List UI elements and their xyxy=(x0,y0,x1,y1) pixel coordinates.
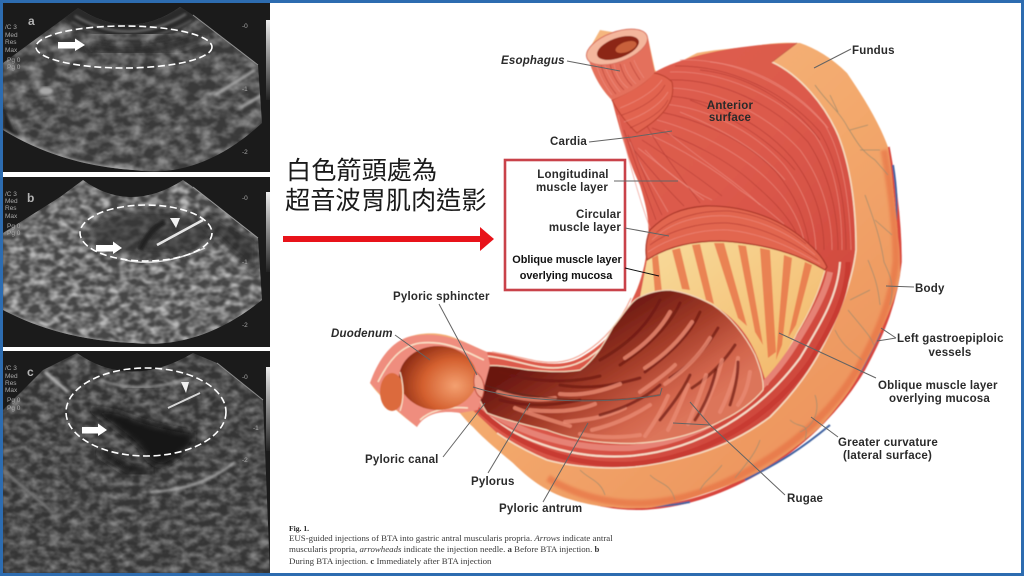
panel: ultrasound b: Pg 0 xyxy=(7,223,21,230)
panel: ultrasound b: Res xyxy=(5,205,17,212)
esophagus tube xyxy=(582,22,655,100)
panel: ultrasound a: Pg 0 xyxy=(7,57,21,64)
anatomical labels: Fundus xyxy=(852,45,895,57)
label: oblique muscle layer in box: overlying mucosa xyxy=(520,270,613,282)
panel: ultrasound b: -0 xyxy=(242,195,248,202)
anatomical labels: Oblique muscle layer xyxy=(878,380,998,392)
anatomical labels: vessels xyxy=(929,347,971,359)
stomach silhouette xyxy=(370,30,900,508)
callout: Chinese caption xyxy=(285,157,486,215)
callout: Chinese caption: 超音波胃肌肉造影 xyxy=(285,187,486,215)
anatomical labels: (lateral surface) xyxy=(843,450,932,462)
panel: ultrasound c: Res xyxy=(5,380,17,387)
anatomical labels: muscle layer xyxy=(549,222,621,234)
panel: ultrasound a: Res xyxy=(5,39,17,46)
anatomical labels: Circular xyxy=(576,209,621,221)
callout: Chinese caption: 白色箭頭處為 xyxy=(286,157,437,185)
panel: ultrasound a: a xyxy=(28,14,35,28)
red muscular wall xyxy=(460,43,856,468)
anatomical labels: Body xyxy=(915,283,945,295)
inner wall layers xyxy=(468,262,848,464)
figure caption: muscularis propria, arrowheads indicate the injection needle. a Before BTA injection. b xyxy=(289,544,600,554)
needle c xyxy=(168,393,200,408)
marker: dashed ellipse b xyxy=(80,205,212,261)
upper wall layers xyxy=(487,298,636,368)
anatomical labels: Rugae xyxy=(787,493,823,505)
longitudinal muscle fibers xyxy=(618,60,851,255)
leader lines xyxy=(395,49,914,502)
anatomical labels: Esophagus xyxy=(501,55,565,67)
arrow: red xyxy=(283,227,494,251)
arrow: white c xyxy=(82,424,107,436)
panel: ultrasound a: Med xyxy=(5,32,18,39)
panel: ultrasound b xyxy=(3,177,270,347)
label: oblique muscle layer in box xyxy=(512,254,623,282)
panel: ultrasound c: Med xyxy=(5,373,18,380)
marker: dashed ellipse a xyxy=(36,26,212,68)
panel: ultrasound b: b xyxy=(27,191,34,205)
anatomical labels: Greater curvature xyxy=(838,437,938,449)
anatomical labels xyxy=(331,45,1004,515)
anatomical labels: Cardia xyxy=(550,136,587,148)
panel: ultrasound a: -1 xyxy=(242,86,248,93)
anatomical labels: Duodenum xyxy=(331,328,393,340)
panel: ultrasound c: c xyxy=(27,365,34,379)
arrow: white a xyxy=(58,38,85,51)
figure caption xyxy=(289,524,613,566)
arrowhead c xyxy=(181,382,189,393)
illustration: stomach anatomy xyxy=(370,22,900,508)
panel: ultrasound b: Max xyxy=(5,213,18,220)
anatomical labels: Pyloric canal xyxy=(365,454,439,466)
panel: ultrasound c: -2 xyxy=(242,457,248,464)
panel: ultrasound b: Med xyxy=(5,198,18,205)
pyloric sphincter xyxy=(474,372,484,398)
anatomical labels: muscle layer xyxy=(536,182,608,194)
figure caption: EUS-guided injections of BTA into gastric antral muscularis propria. Arrows indicate antral xyxy=(289,533,613,543)
anatomical labels: Pyloric antrum xyxy=(499,503,582,515)
panel: ultrasound b: -1 xyxy=(242,259,248,266)
anatomical labels: overlying mucosa xyxy=(889,393,990,405)
arrowhead b xyxy=(170,218,180,228)
orange band outer shading xyxy=(548,150,896,503)
anatomical labels: Pylorus xyxy=(471,476,515,488)
anatomical labels: Left gastroepiploic xyxy=(897,333,1004,345)
panel: ultrasound a: -0 xyxy=(242,23,248,30)
panel: ultrasound b: -2 xyxy=(242,322,248,329)
label box: muscle layers xyxy=(505,160,625,290)
lumen with rugae xyxy=(477,290,763,443)
panel: ultrasound b: /C 3 xyxy=(5,191,17,198)
panel: ultrasound c: Max xyxy=(5,387,18,394)
anatomical labels: Anterior xyxy=(707,100,753,112)
panel: ultrasound b: Pg 0 xyxy=(7,230,21,237)
panel: ultrasound c: /C 3 xyxy=(5,365,17,372)
panel: ultrasound a: /C 3 xyxy=(5,24,17,31)
panel: ultrasound c: Pg 0 xyxy=(7,397,21,404)
panel: ultrasound a: -2 xyxy=(242,149,248,156)
cardia collar xyxy=(612,73,673,133)
duodenum xyxy=(370,335,490,427)
label: oblique muscle layer in box: Oblique muscle layer xyxy=(512,254,623,266)
figure caption: Fig. 1. xyxy=(289,524,309,533)
figure caption: During BTA injection. c Immediately after BTA injection xyxy=(289,556,492,566)
anatomical labels: Pyloric sphincter xyxy=(393,291,490,303)
arrow: white b xyxy=(96,242,122,254)
panel: ultrasound a: Max xyxy=(5,47,18,54)
panel: ultrasound a xyxy=(3,3,270,172)
panel: ultrasound c: -1 xyxy=(253,425,259,432)
circular muscle layer xyxy=(646,206,827,270)
anatomical labels: Longitudinal xyxy=(537,169,609,181)
needle b xyxy=(157,220,203,245)
panel: ultrasound c xyxy=(3,351,270,573)
marker: dashed ellipse c xyxy=(66,368,226,456)
panel: ultrasound a: Pg 0 xyxy=(7,64,21,71)
panel: ultrasound c: -0 xyxy=(242,374,248,381)
outer curvature edge xyxy=(540,147,900,508)
vessels on greater curvature xyxy=(580,85,892,500)
oblique muscle layer xyxy=(640,241,825,385)
panel: ultrasound c: Pg 0 xyxy=(7,405,21,412)
anatomical labels: surface xyxy=(709,112,751,124)
